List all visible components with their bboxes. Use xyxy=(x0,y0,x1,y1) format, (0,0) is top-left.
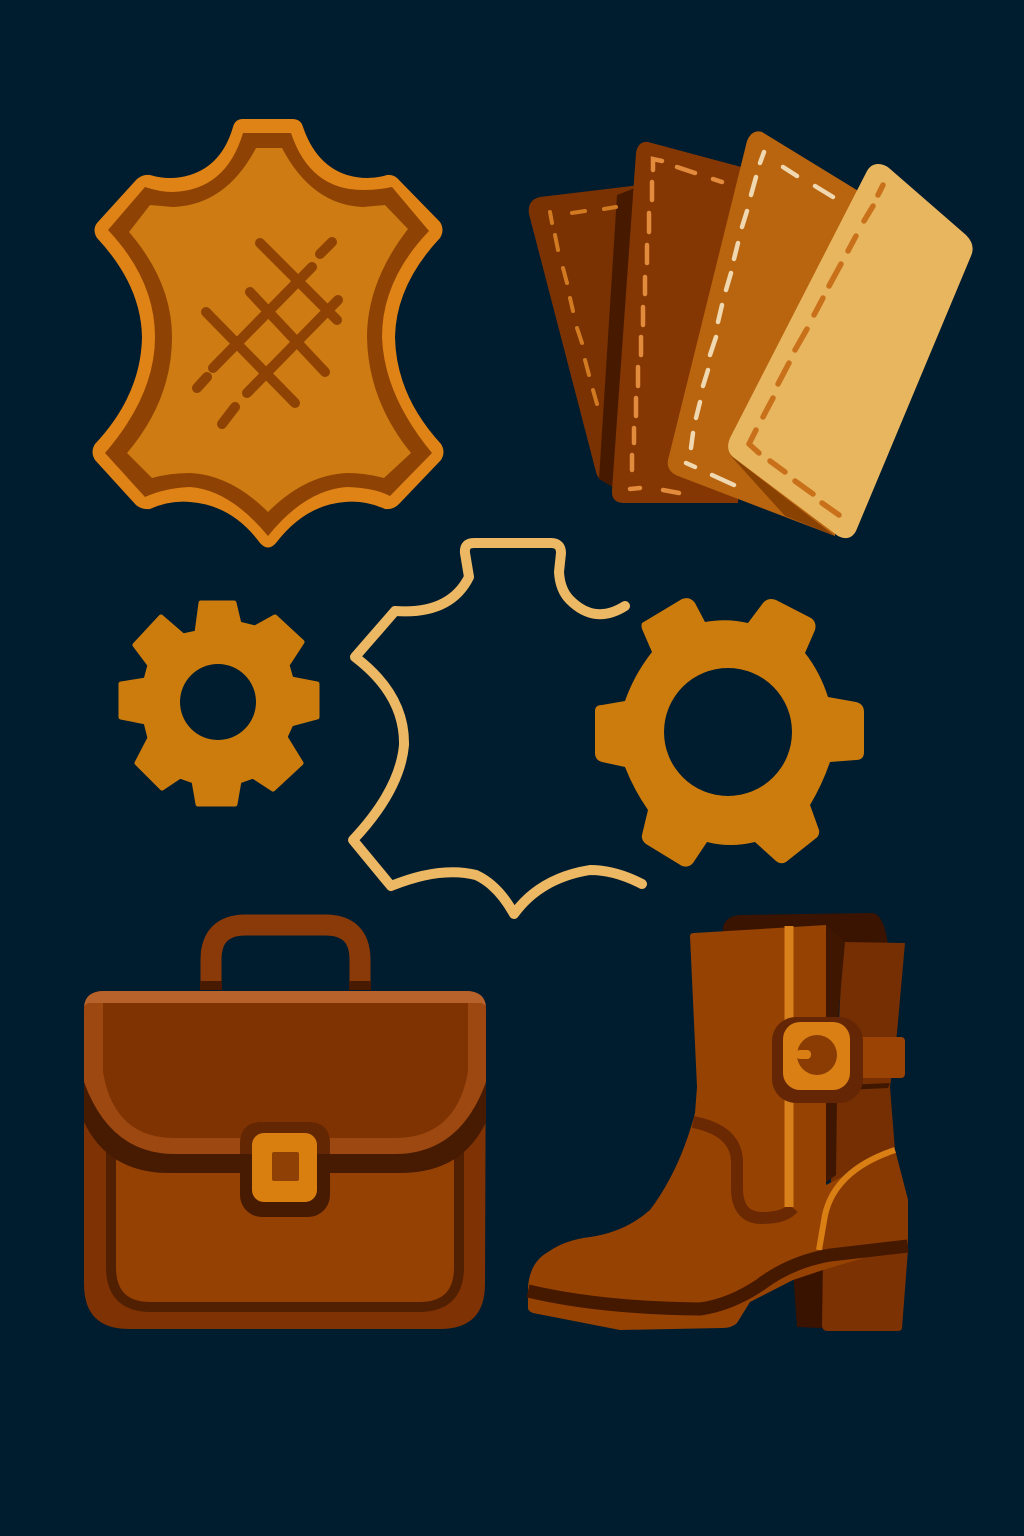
boot main xyxy=(528,925,908,1330)
rear shaft top xyxy=(723,913,888,945)
flap shadow xyxy=(84,1080,486,1173)
vertical strip xyxy=(784,926,794,1207)
side strap xyxy=(845,1083,890,1090)
heel xyxy=(793,1260,830,1328)
icon: leather briefcase xyxy=(84,925,486,1329)
sole stripe xyxy=(528,1246,908,1309)
rear panel xyxy=(830,942,905,1200)
icon: small gear xyxy=(121,603,317,804)
dark strip xyxy=(825,925,845,1183)
body inner panel with stitching border xyxy=(111,1100,459,1307)
handle xyxy=(211,925,360,990)
swatch 2 xyxy=(612,142,745,503)
swatch 1 darkest xyxy=(529,185,640,490)
flap xyxy=(84,991,486,1154)
icon: hide outline xyxy=(353,543,642,914)
icon: leather boot xyxy=(528,913,908,1331)
heel counter xyxy=(820,1150,908,1250)
icon: fan of four leather swatches xyxy=(529,131,973,538)
toe seam xyxy=(693,1122,793,1218)
buckle xyxy=(772,1017,863,1103)
icon: large gear xyxy=(595,598,864,867)
cross-hatch marks xyxy=(197,242,338,424)
swatch 4 lightest xyxy=(728,164,973,538)
swatch 3 xyxy=(668,131,860,536)
body xyxy=(84,991,486,1329)
clasp xyxy=(240,1122,330,1217)
icon: leather hide with cross-hatch stitching xyxy=(92,119,444,548)
